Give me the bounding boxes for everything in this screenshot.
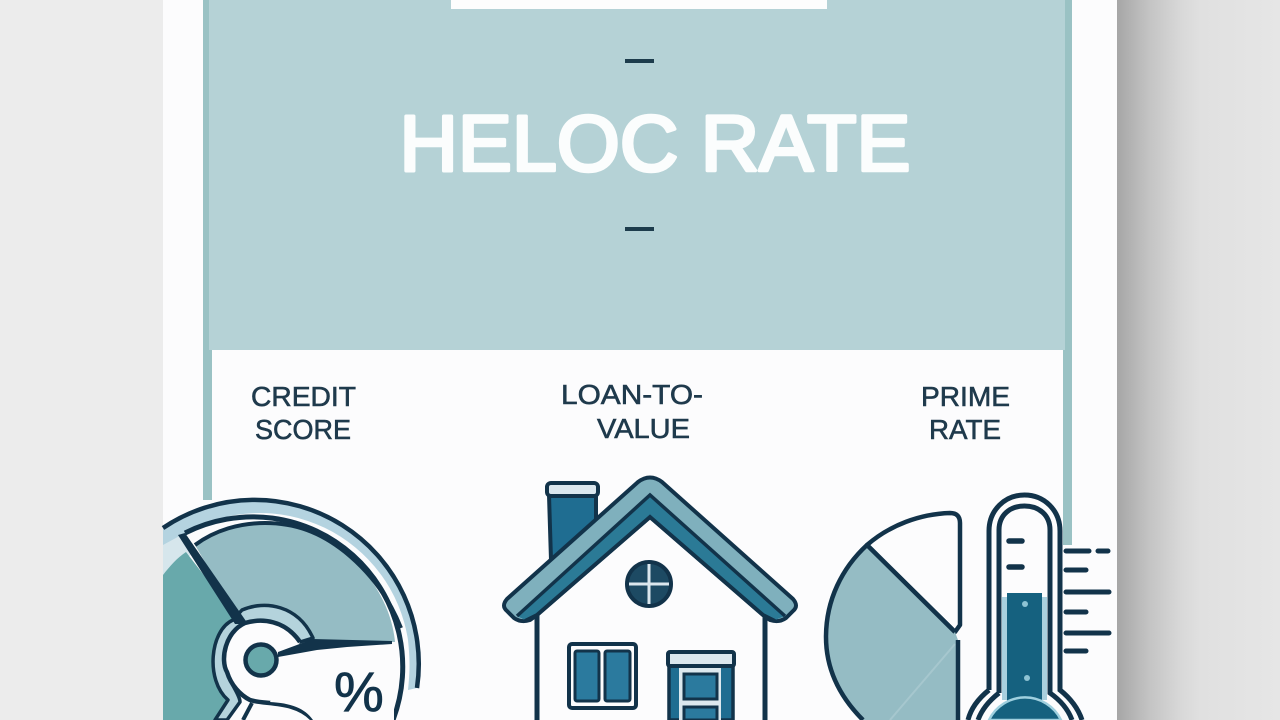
panel: title banner xyxy=(203,0,1072,545)
outer tick marks xyxy=(1066,551,1109,651)
icon: house xyxy=(504,478,796,720)
walls xyxy=(537,510,765,720)
label: credit score xyxy=(251,381,356,445)
hub pivot xyxy=(246,644,276,676)
upper dash xyxy=(625,59,654,63)
long needle xyxy=(178,533,248,624)
hub white body xyxy=(224,621,313,720)
outer dark arc xyxy=(163,500,419,688)
bulb xyxy=(989,697,1061,720)
second dark arc xyxy=(185,517,403,720)
label: loan-to-value xyxy=(561,379,703,444)
roof xyxy=(504,478,796,621)
inner tube xyxy=(978,506,1072,720)
label: prime rate: RATE xyxy=(929,414,1001,445)
roof underside xyxy=(517,495,785,620)
top white tab xyxy=(451,0,827,9)
pale left wedge xyxy=(163,532,195,575)
inner tick marks xyxy=(1009,541,1022,567)
teal sector xyxy=(163,552,240,720)
mercury edge highlight xyxy=(1002,597,1047,700)
white slice xyxy=(867,513,960,632)
icon: credit score gauge xyxy=(163,500,419,720)
label: prime rate xyxy=(921,381,1010,445)
lower dash xyxy=(625,227,654,231)
round window xyxy=(627,562,671,606)
light band between outer arcs xyxy=(163,500,419,690)
icon: pie chart xyxy=(826,513,960,720)
hub collar band xyxy=(213,605,313,720)
tube interior xyxy=(967,495,1082,720)
label: prime rate: PRIME xyxy=(921,381,1010,412)
blue-grey sector xyxy=(195,523,395,642)
shaded slice xyxy=(826,545,958,720)
third dark arc xyxy=(195,523,401,628)
outer tube xyxy=(968,495,1082,720)
mercury column xyxy=(1007,593,1042,705)
white poster page xyxy=(163,0,1117,720)
short needle xyxy=(278,639,392,657)
label: credit score: SCORE xyxy=(255,414,351,445)
lower-right white sector xyxy=(270,643,394,720)
label: credit score: CREDIT xyxy=(251,381,356,412)
chimney xyxy=(549,495,596,560)
icon: thermometer xyxy=(967,495,1109,720)
double window xyxy=(569,644,636,708)
label: loan-to-value: LOAN-TO- xyxy=(561,379,703,410)
label: loan-to-value: VALUE xyxy=(597,413,690,444)
heading: HELOC RATE: HELOC RATE xyxy=(400,98,910,188)
door xyxy=(668,652,734,720)
